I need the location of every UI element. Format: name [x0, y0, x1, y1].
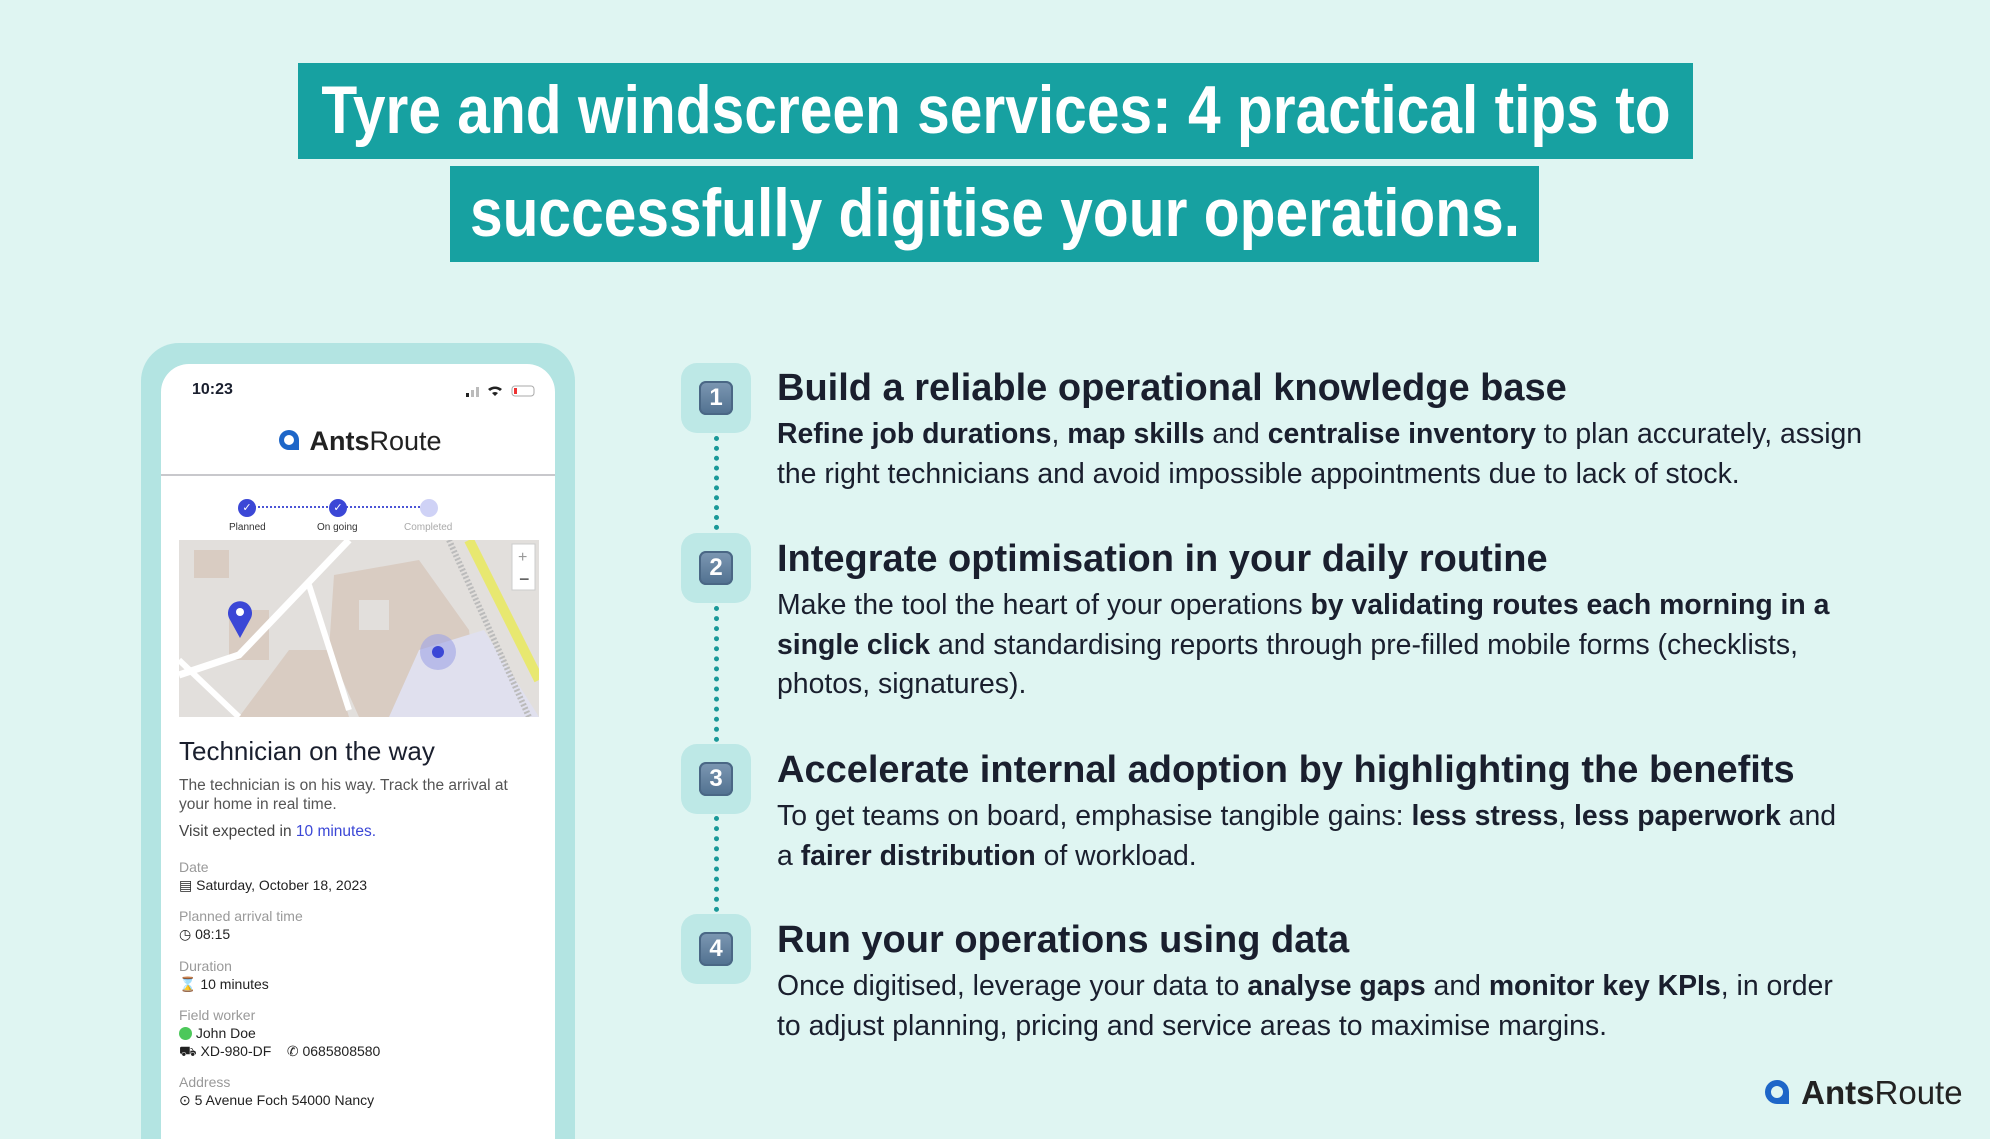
phone screen: Duration — [179, 958, 232, 974]
map — [179, 540, 539, 717]
phone mockup — [141, 343, 575, 1139]
title: successfully digitise your operations. — [469, 175, 1520, 251]
badge 4: 4 — [709, 935, 723, 962]
tip 3 heading: Accelerate internal adoption by highlighting the benefits — [777, 749, 1795, 791]
tip 2 text — [777, 589, 1830, 700]
badge 4 — [681, 914, 751, 984]
brand logo: AntsRoute — [1801, 1074, 1963, 1111]
phone screen: ⊙ 5 Avenue Foch 54000 Nancy — [179, 1092, 374, 1108]
tip 3 text — [777, 800, 1836, 872]
phone screen: ◷ 08:15 — [179, 926, 230, 942]
progress stepper: Planned — [229, 522, 266, 533]
tip 2 heading: Integrate optimisation in your daily routine — [777, 538, 1548, 580]
tip 3 text: a fairer distribution of workload. — [777, 840, 1197, 872]
title — [298, 63, 1693, 262]
tip 1 heading: Build a reliable operational knowledge base — [777, 367, 1567, 409]
progress stepper: ✓ — [333, 502, 343, 514]
map: − — [519, 569, 530, 589]
badge 2 — [681, 533, 751, 603]
phone screen: ⌛ 10 minutes — [179, 976, 269, 992]
tip 1 text: the right technicians and avoid impossible appointments due to lack of stock. — [777, 458, 1740, 490]
badge 2: 2 — [709, 554, 723, 581]
connector lines — [714, 436, 719, 530]
title: Tyre and windscreen services: 4 practical tips to — [321, 72, 1670, 148]
tip 1 text: Refine job durations, map skills and centralise inventory to plan accurately, assign — [777, 418, 1862, 450]
trip info: The technician is on his way. Track the arrival at your home in real time. — [179, 777, 508, 813]
map: + — [518, 549, 527, 566]
tip 1 text — [777, 418, 1862, 490]
tip 4 text: to adjust planning, pricing and service areas to maximise margins. — [777, 1010, 1607, 1042]
tip 4 heading: Run your operations using data — [777, 919, 1349, 961]
progress stepper: On going — [317, 522, 358, 533]
phone screen: Completed — [404, 522, 452, 533]
app logo: AntsRoute — [310, 426, 442, 456]
phone screen — [161, 364, 555, 1139]
tip 4 text — [777, 970, 1833, 1042]
phone screen: Field worker — [179, 1007, 255, 1023]
progress stepper — [229, 499, 452, 533]
badge 1: 1 — [709, 384, 723, 411]
badge 1 — [681, 363, 751, 433]
phone screen: ⛟ XD-980-DF ✆ 0685808580 — [179, 1043, 380, 1059]
tip 2 text: single click and standardising reports through pre-filled mobile forms (checklists, — [777, 628, 1798, 660]
trip info — [179, 736, 508, 840]
phone screen: ▤ Saturday, October 18, 2023 — [179, 877, 367, 893]
trip info: Visit expected in 10 minutes. — [179, 823, 376, 840]
tip 2 text: Make the tool the heart of your operations by validating routes each morning in a — [777, 589, 1829, 621]
phone screen: Planned arrival time — [179, 908, 303, 924]
tip 2 text: photos, signatures). — [777, 668, 1026, 700]
phone screen: Address — [179, 1074, 230, 1090]
progress stepper: ✓ — [242, 502, 252, 514]
phone screen: John Doe — [196, 1025, 256, 1041]
status bar: 10:23 — [192, 381, 233, 398]
phone screen: Date — [179, 859, 209, 875]
tip 3 text: To get teams on board, emphasise tangible gains: less stress, less paperwork and — [777, 800, 1836, 832]
tip 4 text: Once digitised, leverage your data to analyse gaps and monitor key KPIs, in order — [777, 970, 1833, 1002]
badge 3 — [681, 744, 751, 814]
badge 3: 3 — [709, 765, 723, 792]
trip info: Technician on the way — [179, 736, 435, 766]
